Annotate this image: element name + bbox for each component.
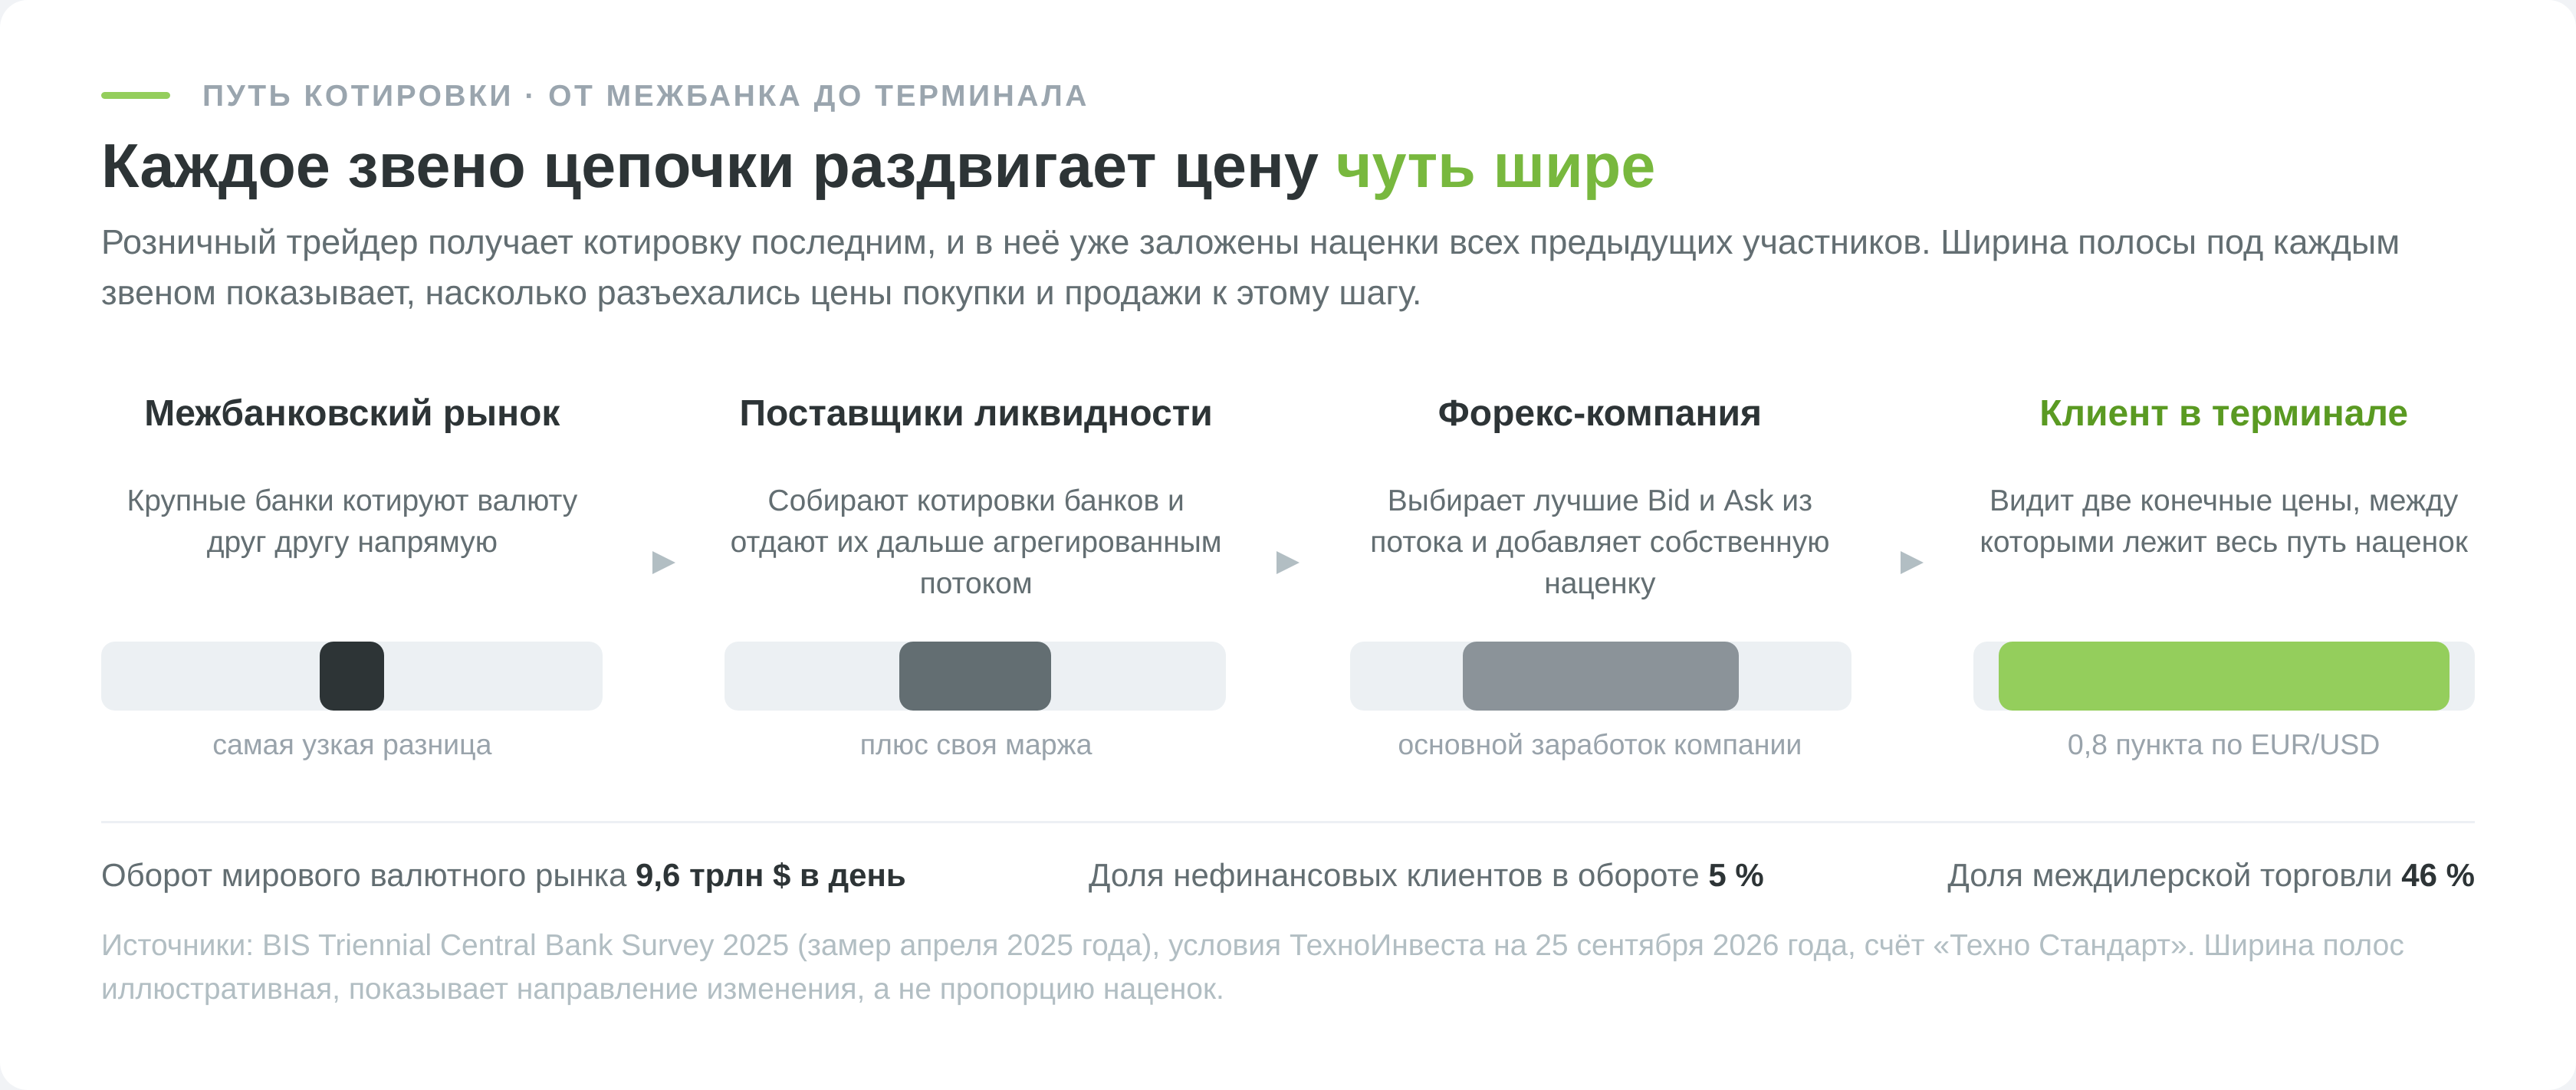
step 2 description: потоком bbox=[920, 567, 1033, 600]
step 4 spread bar bbox=[1973, 642, 2475, 711]
step 2 caption: плюс своя маржа bbox=[860, 728, 1092, 760]
arrow 2 bbox=[1276, 551, 1300, 574]
accent dash bbox=[101, 92, 170, 99]
stat: interdealer: Доля междилерской торговли 46 % bbox=[1947, 857, 2475, 893]
step 2 description: Собирают котировки банков и bbox=[767, 484, 1184, 517]
subtitle: звеном показывает, насколько разъехались цены покупки и продажи к этому шагу. bbox=[101, 273, 1421, 312]
step 4 caption: 0,8 пункта по EUR/USD bbox=[2068, 728, 2380, 760]
arrow 1 bbox=[652, 551, 675, 574]
title: Каждое звено цепочки раздвигает цену чуть шире bbox=[101, 132, 1655, 201]
step 1 spread bar bbox=[101, 642, 603, 711]
subtitle: Розничный трейдер получает котировку последним, и в неё уже заложены наценки всех предыдущих участников. Ширина полосы под каждым bbox=[101, 222, 2400, 261]
step 4 heading: Клиент в терминале bbox=[2039, 393, 2408, 434]
step 3 description: потока и добавляет собственную bbox=[1370, 526, 1829, 559]
step 3 description: наценку bbox=[1544, 567, 1656, 600]
step 2 spread bar bbox=[724, 642, 1226, 711]
step 3 spread bar bbox=[1350, 642, 1852, 711]
step 4 description bbox=[1980, 484, 2468, 559]
step 1 caption: самая узкая разница bbox=[212, 728, 491, 760]
step 3 caption: основной заработок компании bbox=[1398, 728, 1802, 760]
step 3 description: Выбирает лучшие Bid и Ask из bbox=[1388, 484, 1812, 517]
step 2 description bbox=[731, 484, 1222, 600]
step 1 description: друг другу напрямую bbox=[207, 526, 498, 559]
step 3 description bbox=[1370, 484, 1829, 600]
arrow 3 bbox=[1901, 551, 1924, 574]
step 3 heading: Форекс-компания bbox=[1438, 393, 1762, 434]
stat: market turnover: Оборот мирового валютного рынка 9,6 трлн $ в день bbox=[101, 857, 906, 893]
step 1 description bbox=[127, 484, 578, 559]
step 2 heading: Поставщики ликвидности bbox=[739, 393, 1213, 434]
eyebrow: ПУТЬ КОТИРОВКИ · ОТ МЕЖБАНКА ДО ТЕРМИНАЛА bbox=[202, 80, 1089, 113]
step 1 description: Крупные банки котируют валюту bbox=[127, 484, 577, 517]
step 4 description: Видит две конечные цены, между bbox=[1990, 484, 2458, 517]
stat: non-financial clients: Доля нефинансовых клиентов в обороте 5 % bbox=[1089, 857, 1764, 893]
sources note bbox=[101, 929, 2404, 1006]
sources note: иллюстративная, показывает направление изменения, а не пропорцию наценок. bbox=[101, 973, 1224, 1006]
step 2 description: отдают их дальше агрегированным bbox=[731, 526, 1222, 559]
step 4 description: которыми лежит весь путь наценок bbox=[1980, 526, 2468, 559]
subtitle bbox=[101, 222, 2400, 312]
sources note: Источники: BIS Triennial Central Bank Survey 2025 (замер апреля 2025 года), условия ТехноИнвеста на 25 сентября 2026 года, счёт «Техно Стандарт». Ширина полос bbox=[101, 929, 2404, 962]
step 1 heading: Межбанковский рынок bbox=[144, 393, 560, 434]
